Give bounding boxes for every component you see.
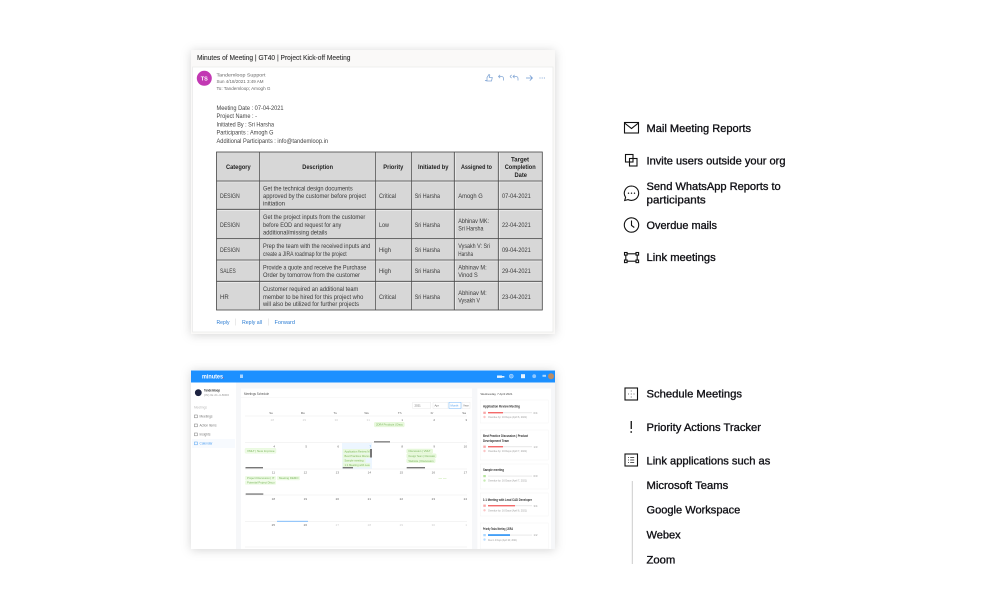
weekday headers [269,411,466,415]
panel: calendar dashboard screenshot [191,370,555,549]
weekday headers: Th [398,411,402,415]
agenda card 1: Application Review Meeting [483,405,520,409]
calendar day numbers: 14 [368,470,371,474]
label: send whatsapp reports: participants [646,194,706,206]
sender details: To: Tandemloop; Amogh G [216,86,271,91]
calendar events: Meeting DEMO [279,476,299,480]
calendar day numbers: 30 [432,523,435,527]
table row 2 [220,214,531,236]
table row 2: 22-04-2021 [502,222,531,229]
agenda card 2: Best Practice Discussion | Product [483,434,529,438]
sidebar menu items: Meetings [200,415,213,419]
agenda card 2: Development Team [483,439,509,443]
meeting metadata: Meeting Date : 07-04-2021 [216,105,284,112]
table header: Description [302,164,333,171]
sidebar: Tandemloop [204,389,220,393]
calendar events: VMLT | New Improve [247,449,275,453]
label: send whatsapp reports [646,181,781,206]
calendar day numbers: 24 [464,497,467,501]
icon: schedule grid [625,388,638,400]
table row 2: before EOD and request for any [263,222,342,229]
calendar view controls: Apr [434,403,439,407]
calendar day numbers: 28 [271,418,274,422]
minutes table [216,152,542,310]
calendar view controls [413,402,470,408]
calendar day numbers: 3 [465,418,467,422]
calendar day numbers: 15 [400,470,403,474]
icon: link meetings [624,252,639,263]
agenda card 2: Overdue by: 16 Days (April 7, 2021) [488,449,527,453]
calendar day numbers: 17 [464,470,467,474]
table row 1: Sri Harsha [415,193,440,200]
agenda card 4 [480,493,548,516]
label: webex: Webex [646,530,681,542]
table row 3: Prep the team with the received inputs and [263,243,371,250]
table row 4: Vinod S [458,272,478,279]
table row 4: SALES [220,268,236,275]
top navigation bar [191,370,555,382]
calendar day numbers: 26 [304,523,307,527]
calendar events: Website | Discussion [408,459,434,463]
calendar day numbers: 19 [304,497,307,501]
table row 4: Abhinav M: [458,264,487,272]
icon: clock [624,218,639,232]
calendar day numbers: 10 [464,444,467,448]
calendar events: Best Practices Discus [344,454,370,458]
label: link meetings: Link meetings [646,252,716,264]
calendar day numbers: 21 [368,497,371,501]
agenda card 4: Overdue by: 16 Days (April 6, 2021) [488,508,527,512]
label: zoom: Zoom [646,555,675,567]
calendar day numbers: 5 [305,444,307,448]
table row 1: Amogh G [458,193,483,200]
sidebar menu items: Action Items [200,424,217,428]
calendar day numbers: 28 [368,523,371,527]
table row 1 [220,186,531,208]
agenda card 5: Due in 4 Days (April 20, 2021) [488,538,517,542]
table row 4: High [379,268,392,275]
calendar day numbers: 18 [272,497,275,501]
agenda card 2: 1/3 [534,445,538,449]
icons: message actions [485,74,545,81]
sidebar [191,382,236,549]
icon: mail [624,122,638,133]
calendar day numbers: 27 [336,523,339,527]
table row 2: additional/missing details [263,230,327,236]
agenda card 3: Sample meeting [483,468,504,472]
agenda card 3: 0/0 [534,474,538,478]
calendar day numbers: 23 [432,497,435,501]
table row 5: Customer required an additional team [263,286,358,293]
table row 5: member to be hired for this project who [263,294,364,301]
weekday headers: Tu [334,411,337,415]
table row 3: Vysakh V: Sri [458,243,490,250]
calendar day numbers: 4 [273,444,275,448]
feature list: email [624,122,786,264]
table row 3: DESIGN [220,247,240,254]
sender avatar [197,71,212,86]
calendar events: Project Discussion | IT [247,476,275,480]
calendar day numbers: 16 [432,470,435,474]
icon: application list [625,454,638,466]
sender details: Sun 4/18/2021 3:49 AM [216,79,264,84]
calendar day numbers: 25 [272,523,275,527]
sidebar menu items: Calendar [200,442,213,446]
feature list: dashboard [625,388,771,567]
table row 5: Abhinav M: [458,290,487,297]
calendar events: Potential Project Discu [247,481,275,485]
meeting metadata: Additional Participants : info@tandemloop.in [216,138,329,145]
agenda card 4: 3/4 [534,504,538,508]
meeting metadata: Project Name : - [216,113,257,120]
reply links: Reply [216,320,230,326]
label: overdue mails: Overdue mails [646,220,717,232]
agenda card 1: Overdue by: 16 Days (April 6, 2021) [488,415,527,419]
reply links: Reply all [242,320,262,326]
calendar events: Sample meeting [344,459,364,463]
agenda card 3: Overdue by: 16 Days (April 7, 2021) [488,479,527,483]
table row 1: 07-04-2021 [502,193,531,200]
table header: Assigned to [461,164,492,171]
table row 5: Vysakh V [458,298,481,305]
calendar events [245,422,446,485]
calendar view controls: Month [450,403,459,407]
sidebar: Meetings [194,406,207,410]
table row 2: Abhinav MK: [458,218,489,225]
overflow bars [246,441,425,522]
table row 1: approved by the customer before project [263,193,366,200]
calendar events: Application Review M [344,449,370,453]
sidebar menu items: Insights [200,433,211,437]
sender details: Tandemloop Support [216,72,266,78]
sidebar: (IN) IE 21-4-8000 [204,393,230,397]
calendar view controls: Year [463,403,469,407]
calendar day numbers: 12 [304,470,307,474]
calendar day numbers: 20 [336,497,339,501]
table row 5: Sri Harsha [415,294,440,301]
table row 1: Critical [379,193,396,200]
calendar day numbers: 31 [367,418,370,422]
calendar panel: Meetings Schedule [244,392,269,396]
table row 2: Sri Harsha [415,222,440,229]
agenda card 1 [480,400,548,423]
table row 4 [220,264,531,279]
sidebar menu items [194,415,217,446]
table row 4: Order by tomorrow from the customer [263,272,360,279]
label: priority actions tracker: Priority Actions Tracker [646,422,761,434]
table header: Completion [505,164,536,171]
table row 2: Low [379,222,389,229]
table row 3: High [379,247,392,254]
table row 5: HR [220,294,229,301]
calendar events: 2DRA Products | Discu [376,423,403,427]
table row 5: will also be utilized for further projects [262,301,359,308]
calendar day numbers: 1 [401,418,403,422]
sender avatar: TS [201,76,208,82]
label: schedule meetings: Schedule Meetings [646,389,742,401]
table row 1: Get the technical design documents [263,186,353,192]
calendar day numbers: 2 [433,418,435,422]
agenda card 5 [480,523,548,549]
table row 5: Critical [379,294,396,301]
calendar view controls: 2021 [414,403,421,407]
agenda card 4: 1:1 Meeting with Lead CAD Developer [483,498,533,502]
weekday headers: Mo [301,411,305,415]
calendar events: Design Team | Discussio [408,454,435,458]
calendar panel [241,388,472,549]
label: link applications: Link applications such as [646,455,771,467]
meeting metadata: Initiated By : Sri Harsha [216,121,274,128]
icon: invite overlap squares [626,154,637,166]
label: mail meeting reports: Mail Meeting Reports [646,123,751,135]
icon: chat bubble [624,186,639,200]
calendar day numbers: 30 [335,418,338,422]
calendar day numbers: 29 [400,523,403,527]
agenda side panel: Wednesday, 7 April 2021 [480,392,513,396]
label: invite users: Invite users outside your org [646,155,786,167]
calendar day numbers [271,418,467,527]
calendar day numbers: 7 [369,444,371,448]
table row 1: initiation [263,200,286,208]
agenda card 1: 0/4 [534,411,538,415]
calendar day numbers: 29 [303,418,306,422]
calendar day numbers: 8 [401,444,403,448]
calendar day numbers: 1 [465,523,467,527]
table header: Initiated by [418,164,449,171]
icon: exclamation mark [630,421,632,433]
meeting metadata: Participants : Amogh G [216,130,274,137]
reply links [216,318,295,326]
table row 2: Get the project inputs from the customer [263,214,365,221]
table header [226,157,536,179]
weekday headers: We [364,411,369,415]
table row 4: 29-04-2021 [502,268,531,275]
table row 3: 09-04-2021 [502,247,531,254]
table row 4: Provide a quote and receive the Purchase [263,264,367,272]
label: send whatsapp reports: Send WhatsApp Reports to [646,181,781,193]
label: microsoft teams: Microsoft Teams [646,480,729,492]
calendar day numbers: 22 [400,497,403,501]
table row 3: Sri Harsha [415,247,440,254]
reply links: Forward [274,320,295,326]
table header: Category [226,164,251,171]
calendar day numbers: 6 [337,444,339,448]
table row 2: Sri Harsha [458,226,484,233]
weekday headers: Sa [462,411,466,415]
table header: Target [511,157,529,164]
agenda card 3 [480,464,548,489]
calendar day numbers: 9 [433,444,435,448]
agenda card 2 [480,430,548,460]
label: google workspace: Google Workspace [646,505,740,517]
calendar day numbers: 13 [336,470,339,474]
agenda card 5: 1/2 [534,533,538,537]
table row 3: Harsha [458,251,473,258]
agenda side panel [477,388,551,549]
table header: Priority [383,164,404,171]
table row 2: DESIGN [220,222,240,229]
email subject heading: Minutes of Meeting | GT40 | Project Kick-off Meeting [197,55,351,62]
top navigation bar: minutes [202,374,223,380]
table row 4: Sri Harsha [415,268,440,275]
calendar day numbers: 11 [272,470,275,474]
weekday headers: Su [269,411,273,415]
table row 3: create a JIRA roadmap for the project [263,251,347,258]
calendar events: 1:1 Meeting with Lea [344,463,370,467]
table row 5 [220,286,531,308]
table row 3 [220,243,531,258]
calendar events: Discussion | VMLT [408,449,431,453]
table header: Date [514,172,528,179]
panel: email screenshot [191,50,555,334]
agenda card 5: Priority Tasks Meeting | 2DRA [483,527,513,531]
table row 5: 23-04-2021 [502,294,531,301]
sender details [216,72,271,91]
table row 1: DESIGN [220,193,240,200]
weekday headers: Fr [431,411,434,415]
meeting metadata [216,105,329,145]
